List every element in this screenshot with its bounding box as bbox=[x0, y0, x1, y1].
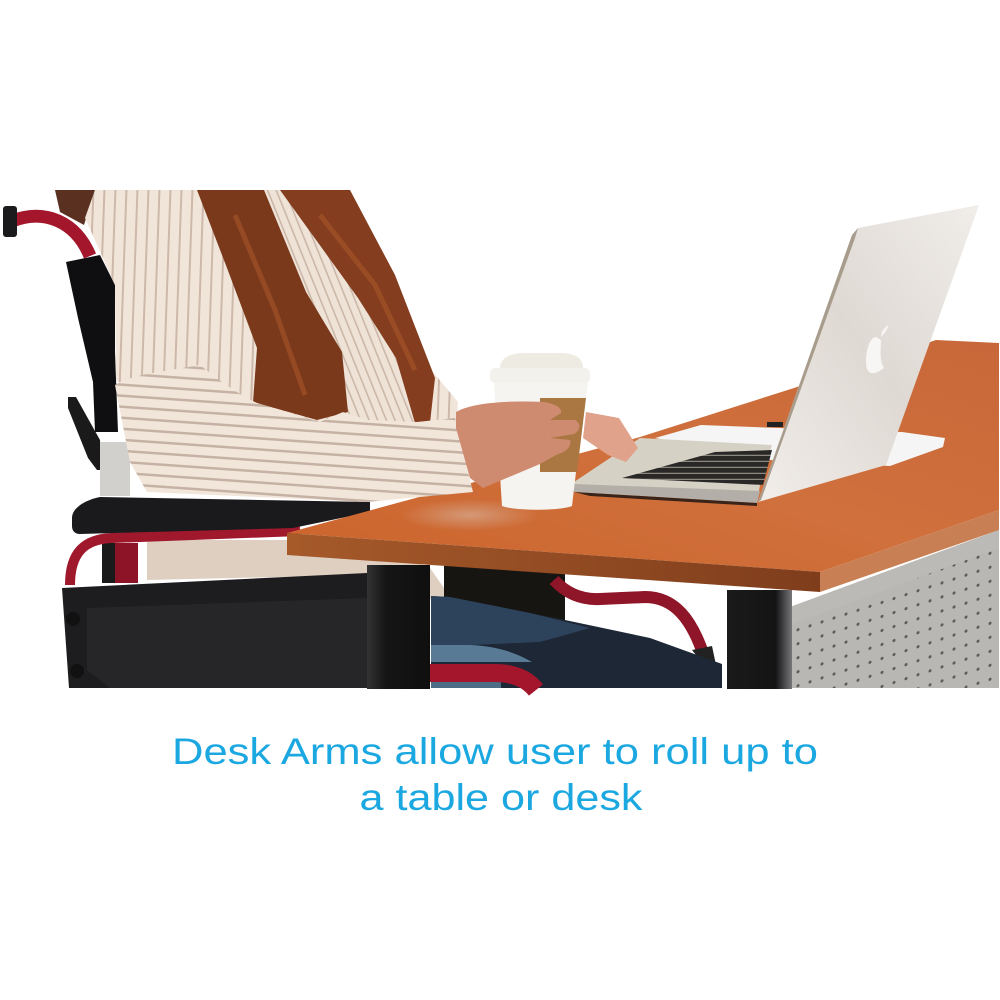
hand on cup bbox=[456, 401, 579, 488]
jeans bbox=[431, 596, 722, 688]
wheelchair red frame bbox=[70, 531, 300, 585]
notebook bbox=[655, 425, 945, 466]
apple logo bbox=[866, 325, 888, 373]
lower sweater bbox=[147, 540, 451, 600]
coffee cup bbox=[490, 353, 590, 510]
caption bbox=[172, 731, 818, 818]
desk front edge bbox=[287, 533, 820, 592]
armrest pad bbox=[72, 497, 370, 534]
wheelchair lower red tube bbox=[430, 673, 536, 690]
desk leg right bbox=[727, 590, 792, 689]
wheelchair back upholstery bbox=[66, 255, 118, 432]
wheelchair push handle bbox=[3, 206, 90, 256]
perforated modesty panel bbox=[790, 530, 999, 688]
chest knit bbox=[260, 190, 430, 425]
pen clip bbox=[767, 422, 783, 427]
hand on laptop bbox=[583, 412, 638, 462]
desk right edge bbox=[820, 510, 999, 592]
brake lever bbox=[68, 397, 102, 470]
caption line 2: a table or desk bbox=[360, 777, 643, 818]
hair behind shoulder bbox=[55, 190, 95, 225]
hair highlights bbox=[235, 215, 415, 395]
sleeve bbox=[115, 365, 473, 502]
laptop lid bbox=[758, 205, 979, 502]
chrome post bbox=[100, 442, 130, 496]
desk top surface bbox=[287, 340, 999, 572]
laptop base bbox=[574, 438, 772, 506]
hair right strand bbox=[280, 190, 435, 423]
wheelchair side panel bbox=[62, 573, 367, 688]
dark chair back under desk bbox=[444, 565, 565, 620]
desk reflection bbox=[400, 499, 540, 531]
caption line 1: Desk Arms allow user to roll up to bbox=[172, 731, 818, 772]
torso bbox=[85, 190, 458, 440]
hair left strand bbox=[197, 190, 348, 420]
photo: woman in wheelchair at desk bbox=[3, 190, 999, 690]
wheelchair frame right bbox=[554, 580, 704, 656]
wheelchair vertical tubes bbox=[102, 543, 138, 583]
desk leg left bbox=[367, 565, 430, 689]
footrest bracket bbox=[692, 646, 716, 665]
